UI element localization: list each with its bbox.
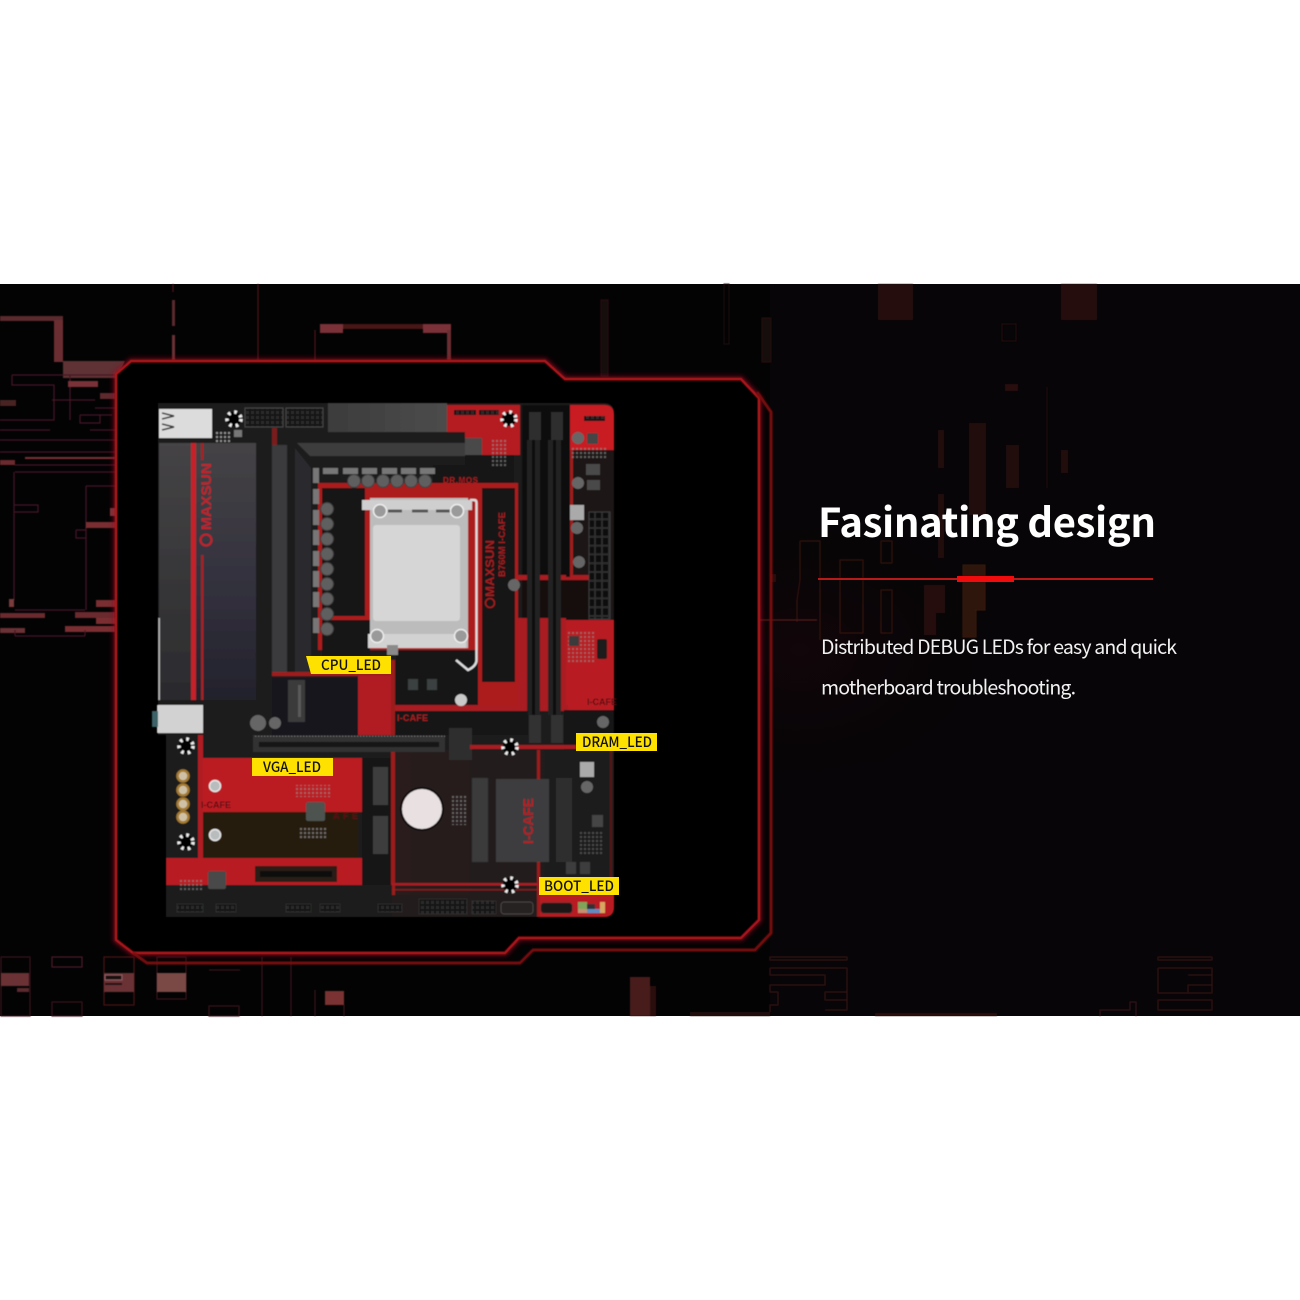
- chips: [580, 862, 590, 874]
- right side components: [454, 410, 617, 707]
- smd cluster: [566, 632, 596, 662]
- board name text: MAXSUN: [485, 540, 497, 597]
- right dark power red edge: [568, 450, 573, 578]
- ram slot a: [527, 440, 540, 715]
- 24 pin power connector: [589, 512, 610, 619]
- icon: led star dram: [503, 740, 517, 754]
- m.2 navy panel: [272, 678, 358, 735]
- red top line: [272, 672, 392, 676]
- dark top vrm label zone: [433, 455, 514, 483]
- chipset smd: [452, 795, 467, 825]
- socket lower component 2: [427, 679, 437, 690]
- dark block under vrm: [322, 620, 370, 656]
- icon: led star boot: [503, 878, 517, 892]
- cap: [571, 522, 583, 534]
- panel: chamfered glowing frame: [116, 361, 771, 963]
- right of vga red strip: [362, 758, 392, 895]
- heatsink dark fin: [256, 443, 272, 700]
- ram clip bottom b: [551, 715, 563, 743]
- red zone lower right of socket: [478, 650, 518, 708]
- cap: [572, 477, 584, 489]
- model name text: B760M I-CAFE: [497, 512, 508, 577]
- black maxsun strip: [482, 488, 515, 682]
- m.2 connector upper: [364, 764, 390, 808]
- chip: [586, 464, 600, 475]
- top red header 2: [479, 410, 499, 415]
- lower red band: [166, 858, 362, 885]
- vrm left chokes: [320, 502, 334, 636]
- cmos battery face: [402, 789, 442, 829]
- ram zone lower: [522, 580, 563, 618]
- heatsink fin angled: [295, 448, 311, 673]
- title divider: [818, 576, 1153, 582]
- top heatsink lower band: [297, 432, 465, 445]
- heatsink maxsun text: MAXSUN: [198, 463, 214, 530]
- mid dark band under pcie: [392, 735, 472, 750]
- gold capacitors: [178, 770, 188, 822]
- vrm top mosfets: [323, 468, 435, 474]
- lower right dark board: [392, 750, 614, 895]
- callout: BOOT_LED: BOOT_LED: [544, 876, 614, 896]
- chip: [587, 433, 598, 444]
- socket top retention bar: [362, 500, 472, 510]
- heatsink logo: [200, 534, 212, 546]
- cpu socket: [362, 498, 476, 670]
- small heatsink: [465, 438, 482, 455]
- cmos battery: [400, 787, 444, 831]
- icon: led star top red: [502, 412, 516, 426]
- callout: CPU_LED: CPU_LED: [321, 655, 381, 675]
- header: [597, 639, 607, 659]
- io usb port: [159, 409, 212, 438]
- socket white wire: [456, 500, 476, 670]
- pcie x1 slot: [255, 866, 337, 882]
- heatsink dark slot: [287, 445, 295, 673]
- top right red pcb zone: [447, 405, 520, 455]
- top heatsink block: [328, 403, 447, 432]
- dr.mos label: DR.MOS: [443, 476, 479, 485]
- maxsun logo right: [486, 598, 494, 608]
- smd cluster: [216, 431, 232, 443]
- red lower strip: [392, 705, 568, 711]
- description text: Distributed DEBUG LEDs for easy and quick: [821, 631, 1177, 660]
- lan port: [157, 705, 203, 733]
- left lower column: [166, 735, 198, 860]
- right dark block: [563, 580, 590, 620]
- usb port slots: [162, 413, 174, 430]
- coloured pins: [578, 902, 605, 913]
- socket top retention shadow: [388, 510, 450, 512]
- pcie latch: [449, 728, 472, 760]
- right red gap: [563, 575, 590, 580]
- smd near chipset: [578, 830, 602, 854]
- top left red trace: [272, 428, 277, 450]
- i-cafe left text: I-CAFE: [201, 800, 231, 810]
- chipset heatsink main: [496, 779, 549, 862]
- motherboard: [152, 403, 617, 917]
- left vrm heatsink: [159, 443, 191, 700]
- top heatsink fin base: [310, 456, 465, 465]
- dark block left of socket: [322, 488, 365, 616]
- right dark power zone: [570, 450, 614, 622]
- top heatsink fin: [297, 443, 465, 456]
- heatsink gray fin: [272, 445, 287, 673]
- smd group: [298, 826, 328, 840]
- header: [584, 416, 605, 421]
- heatsink red stripe: [191, 443, 196, 700]
- board right edge trace: [610, 750, 612, 895]
- bottom dark: [166, 885, 392, 917]
- chips: [566, 862, 576, 874]
- heatsink thin stripe top: [201, 443, 204, 460]
- background circuit traces: left and top: [0, 284, 608, 636]
- description text: motherboard troubleshooting.: [821, 672, 1076, 700]
- smd cluster: [490, 438, 506, 466]
- bottom dark right: [392, 895, 538, 917]
- chip: [208, 871, 226, 889]
- lower right red pcb zone: [563, 620, 614, 710]
- socket bottom tab: [387, 645, 398, 655]
- pch chip: [306, 802, 325, 821]
- ram clip top b: [551, 412, 563, 440]
- m.2 socket slot: [298, 685, 301, 717]
- m.2 connector lower: [364, 812, 390, 858]
- chip: [569, 636, 579, 646]
- ram slot a center: [532, 440, 535, 715]
- bottom right red corner: [538, 895, 614, 917]
- right red pcb zone: [570, 405, 614, 450]
- usb-c header on red: [541, 903, 572, 913]
- i-cafe right text: AFE: [333, 811, 358, 821]
- red stripe: [391, 660, 395, 917]
- vga red pcb: [198, 758, 362, 812]
- standoff holes: [210, 780, 220, 840]
- icon: led star vga a: [179, 739, 193, 753]
- inductor: [570, 505, 584, 520]
- chipset heatsink left: [472, 778, 488, 862]
- ram clip bottom a: [529, 715, 541, 743]
- heatsink right panel: [196, 443, 256, 700]
- mid left dark area: [197, 700, 358, 760]
- board base: [158, 403, 614, 917]
- small chip: [234, 430, 242, 437]
- description text: [821, 631, 1177, 700]
- ram clip top a: [529, 412, 541, 440]
- ram zone: [522, 405, 570, 577]
- icon: led star near power connector: [227, 412, 241, 426]
- background circuit traces: right: [724, 284, 1097, 640]
- black block under socket: [396, 650, 478, 705]
- chipset heatsink right: [556, 778, 572, 862]
- screws: [370, 504, 468, 642]
- cap: [581, 781, 593, 793]
- smd cluster: [570, 448, 606, 460]
- caps near pcie: [250, 715, 281, 731]
- standoff: [455, 694, 467, 706]
- sata port: [501, 902, 533, 914]
- smd group: [296, 785, 330, 797]
- black background band: [0, 284, 1300, 1016]
- smd group: [178, 878, 204, 892]
- cap: [572, 432, 584, 444]
- socket lower components: [408, 679, 418, 690]
- heatsink thin stripe: [201, 555, 204, 700]
- socket bottom bar: [368, 634, 466, 648]
- chipset red vertical trace: [537, 750, 540, 917]
- cap: [573, 556, 585, 568]
- cap on strip: [508, 579, 520, 591]
- background circuit traces: bottom: [1, 957, 1212, 1016]
- inductor: [580, 762, 594, 777]
- io zone connector block 1: [245, 408, 283, 427]
- i-cafe under socket text: I-CAFE: [397, 713, 428, 723]
- ram slot b: [548, 440, 561, 715]
- lan port teal end: [152, 711, 158, 727]
- ram slot b center: [553, 440, 556, 715]
- chip: [587, 480, 600, 490]
- title: Fasinating design: [818, 491, 1156, 549]
- red block right of m.2: [358, 674, 392, 736]
- pcie x16 slot: [253, 735, 445, 752]
- vrm top chokes: [348, 474, 432, 488]
- m.2 card upper: [373, 767, 388, 805]
- left edge highlight: [158, 618, 160, 700]
- dark olive panel: [203, 812, 358, 858]
- red zone around socket: [318, 483, 518, 650]
- callout: VGA_LED: VGA_LED: [262, 757, 321, 777]
- icon: led star vga b: [179, 835, 193, 849]
- m.2 card lower: [373, 816, 388, 854]
- top red header: [454, 410, 476, 415]
- cap: [597, 716, 609, 728]
- chipset i-cafe text: I-CAFE: [520, 798, 536, 844]
- socket frame: [370, 498, 468, 648]
- cpu lid: [373, 525, 460, 621]
- io zone connector block 2: [286, 408, 323, 427]
- mid dark band: [392, 711, 528, 735]
- ram zone red gaps: [518, 575, 566, 710]
- right dark mid: [564, 710, 614, 751]
- m.2 socket: [288, 680, 305, 722]
- bottom headers: [177, 899, 496, 914]
- i-cafe text: I-CAFE: [587, 697, 617, 707]
- red debug traces: [392, 745, 576, 890]
- callout: DRAM_LED: DRAM_LED: [582, 732, 652, 752]
- vrm left mosfets: [313, 468, 319, 633]
- chip: [592, 815, 603, 827]
- vga red left strip: [198, 735, 203, 860]
